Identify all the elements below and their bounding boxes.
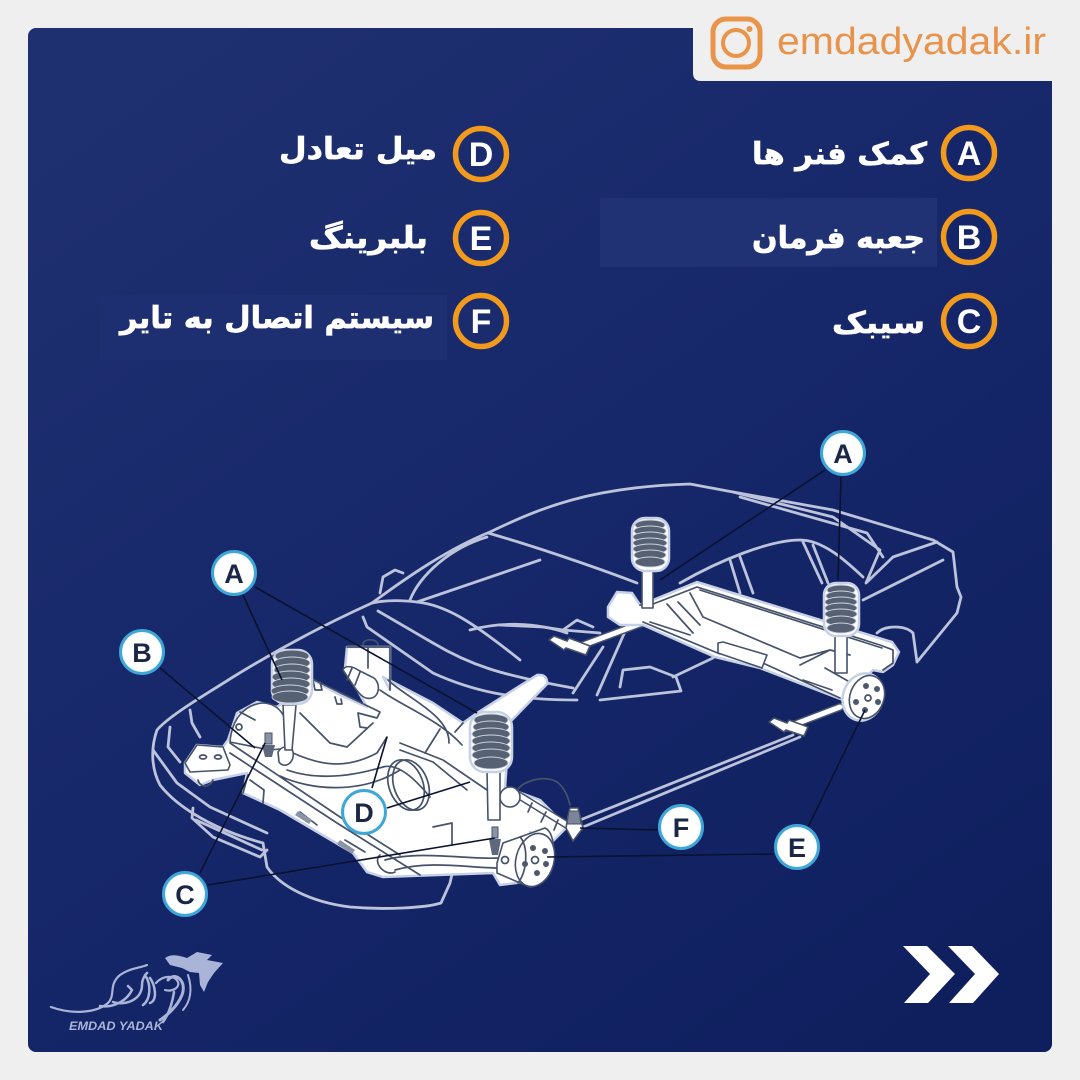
coil spring right <box>470 712 512 772</box>
marker C <box>164 872 206 916</box>
frame box <box>718 642 767 668</box>
legend item E: بلبرینگ <box>309 220 428 256</box>
marker E <box>776 826 818 868</box>
arrows: next chevrons <box>903 946 999 1003</box>
ball joint right <box>489 827 501 855</box>
icon: instagram <box>713 19 760 67</box>
legend item A <box>752 128 994 178</box>
marker D: D <box>354 798 374 828</box>
bracket left <box>185 745 230 772</box>
coil spring rear left <box>632 518 669 571</box>
right trailing rod <box>769 707 840 736</box>
legend item A: کمک فنر ها <box>752 137 928 172</box>
legend item A: A <box>957 135 981 173</box>
logo wordmark: EMDAD YADAK <box>69 1021 164 1033</box>
marker A rear: A <box>833 439 853 469</box>
legend item F: F <box>471 303 491 341</box>
rear frame <box>608 582 899 700</box>
marker A front <box>212 552 256 594</box>
front suspension assembly <box>185 640 583 891</box>
legend item C: سیبک <box>832 306 925 341</box>
marker F <box>660 806 702 848</box>
legend item B: جعبه فرمان <box>752 221 925 256</box>
coil spring left <box>271 650 312 704</box>
instagram tab <box>693 0 1052 81</box>
legend item C: C <box>957 303 981 341</box>
car outline <box>153 484 961 908</box>
strut rod right <box>487 770 500 820</box>
logo rider silhouette <box>165 952 223 992</box>
callout lines <box>160 470 865 885</box>
marker D <box>342 790 386 834</box>
legend item F <box>118 296 506 346</box>
highlight strip behind wheel connection <box>100 295 447 360</box>
exhaust ring <box>381 755 436 815</box>
steering housing dome <box>230 703 290 750</box>
legend item C <box>832 296 994 346</box>
marker C: C <box>175 880 195 910</box>
marker B <box>120 630 164 674</box>
knuckle blob <box>278 747 293 765</box>
frame detail lines <box>640 587 893 698</box>
tie rod <box>500 779 583 841</box>
marker A front: A <box>224 559 244 589</box>
left trailing rod <box>549 622 645 655</box>
legend item E <box>309 212 506 264</box>
legend item B: B <box>957 219 981 257</box>
marker A rear <box>822 432 864 474</box>
engine and subframe body <box>185 647 567 885</box>
site handle: emdadyadak.ir <box>777 21 1046 63</box>
legend item D: D <box>469 136 493 174</box>
highlight strip behind steering box <box>600 198 937 267</box>
air intake pipe <box>477 675 547 722</box>
marker F: F <box>673 813 689 843</box>
legend item F: سیستم اتصال به تایر <box>118 301 434 336</box>
ball joint left <box>262 733 275 757</box>
strut rod rear left <box>642 568 653 608</box>
marker B: B <box>132 638 152 668</box>
strut rod rear right <box>835 632 847 673</box>
hub and wheel <box>497 828 560 891</box>
rear suspension assembly <box>549 518 899 736</box>
legend item D <box>279 128 506 180</box>
cross member and arms <box>230 737 430 875</box>
legend item D: میل تعادل <box>279 132 437 167</box>
coil spring rear right <box>824 583 859 636</box>
reservoir and bulb <box>343 640 390 698</box>
marker E: E <box>788 833 806 863</box>
legend item E: E <box>470 220 492 258</box>
engine detail lines <box>300 678 380 747</box>
strut rod left <box>283 705 296 750</box>
logo <box>51 952 223 1033</box>
legend item B <box>752 212 994 262</box>
rear wheel <box>836 668 890 726</box>
